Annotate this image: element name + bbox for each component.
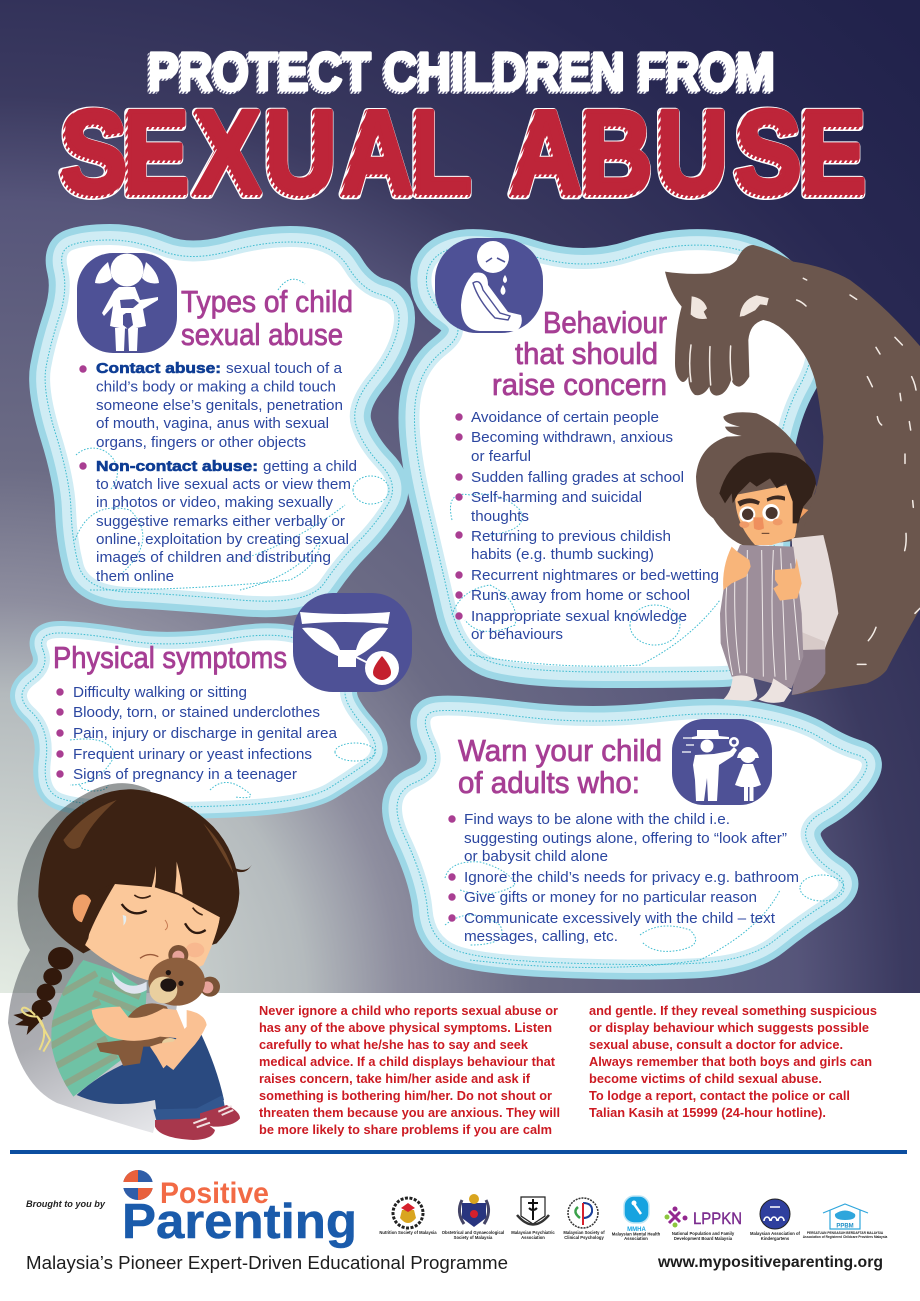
title — [60, 42, 866, 220]
text: warning list: Find ways to be alone with the child i.e. — [464, 811, 730, 828]
text: symptoms list: Frequent urinary or yeast infections — [73, 746, 312, 763]
text: abuse types list: online, exploitation by creating sexual — [96, 531, 349, 548]
icon: child being touched — [77, 253, 177, 353]
title line 2: SEXUAL ABUSE — [60, 88, 865, 220]
website: www.mypositiveparenting.org — [657, 1254, 883, 1271]
text: behaviour list: Returning to previous childish — [471, 528, 671, 545]
heading: physical symptoms: Physical symptoms — [53, 640, 287, 675]
advice column 2: become victims of child sexual abuse. — [589, 1071, 822, 1086]
title line 1: PROTECT CHILDREN FROM — [146, 44, 773, 104]
shoes — [155, 1105, 240, 1140]
text: behaviour list — [455, 409, 719, 643]
panel: types of child sexual abuse — [45, 240, 399, 601]
heading: types of child sexual abuse: sexual abuse — [181, 317, 343, 352]
advice column 2: Talian Kasih at 15999 (24-hour hotline). — [589, 1105, 826, 1120]
text: behaviour list: Runs away from home or school — [471, 587, 690, 604]
text: symptoms list: Difficulty walking or sitting — [73, 684, 247, 701]
shirt — [50, 960, 147, 1097]
text: abuse types list: someone else’s genitals, penetration — [96, 397, 343, 414]
logo: nutrition society: Nutrition Society of Malaysia — [379, 1230, 437, 1235]
advice column 2: or display behaviour which suggests possible — [589, 1020, 869, 1035]
logo: parenting: Parenting — [122, 1195, 357, 1249]
logo: LPPKN: National Population and Family — [672, 1231, 735, 1236]
advice column 1: has any of the above physical symptoms. Listen — [259, 1020, 552, 1035]
advice column 2 — [589, 1003, 877, 1120]
advice column 1 — [259, 1003, 560, 1137]
logo: clinical psychology — [563, 1198, 605, 1240]
logo: PPBM — [803, 1204, 887, 1239]
heading: types of child sexual abuse: Types of child — [181, 284, 353, 319]
hair — [38, 789, 252, 953]
logo: clinical psychology: Clinical Psychology — [564, 1235, 604, 1240]
text: behaviour list: Inappropriate sexual knowledge — [471, 608, 687, 625]
heading: behaviour that should raise concern: Behaviour — [543, 305, 667, 340]
icon: underwear with blood drop — [293, 593, 412, 692]
text: behaviour list: Self-harming and suicidal — [471, 489, 642, 506]
text: behaviour list: habits (e.g. thumb sucking) — [471, 546, 654, 563]
text: behaviour list: Sudden falling grades at school — [471, 469, 684, 486]
icon: crying child — [435, 238, 543, 333]
logo: psychiatric association — [511, 1197, 555, 1240]
logo: MMHA: Malaysian Mental Health — [612, 1232, 661, 1236]
advice column 1: threaten them because you are anxious. They will — [259, 1105, 560, 1120]
logo: kindergartens association: Malaysian Association of — [750, 1231, 801, 1236]
heading: types of child sexual abuse — [181, 284, 353, 352]
text: symptoms list: Pain, injury or discharge in genital area — [73, 725, 338, 742]
illustration: crying girl with teddy bear — [13, 789, 252, 1140]
icon: adult approaching child — [672, 719, 772, 805]
text: abuse types list: to watch live sexual acts or view them — [96, 476, 351, 493]
title line 2: SEXUAL ABUSE — [60, 88, 865, 220]
text: abuse types list: suggestive remarks either verbally or — [96, 513, 345, 530]
tagline: Malaysia’s Pioneer Expert-Driven Educational Programme — [26, 1252, 508, 1273]
logo: positive: Positive — [160, 1177, 269, 1210]
text: symptoms list: Signs of pregnancy in a teenager — [73, 766, 297, 783]
heading: warn your child of adults who — [458, 733, 662, 800]
frightened boy — [719, 452, 838, 703]
text: warning list: Ignore the child’s needs for privacy e.g. bathroom — [464, 869, 799, 886]
logo: LPPKN: LPPKN — [693, 1209, 742, 1228]
logo: positive parenting emblem — [122, 1170, 154, 1200]
text: abuse types list: Non-contact abuse: — [96, 458, 258, 475]
heading: behaviour that should raise concern: that should — [515, 336, 658, 371]
panel: warn your child — [397, 710, 867, 968]
heading: behaviour that should raise concern — [492, 305, 667, 402]
text: abuse types list: child’s body or making a child touch — [96, 378, 336, 396]
text: abuse types list: of mouth, vagina, anus with sexual — [96, 415, 329, 432]
text: abuse types list: Contact abuse: — [96, 360, 221, 377]
face — [73, 862, 235, 980]
logo: psychiatric association: Association — [521, 1235, 545, 1240]
text: abuse types list: in photos or video, making sexually — [96, 494, 333, 511]
text: warning list — [448, 811, 799, 945]
text: advice in red — [259, 1003, 877, 1137]
heading: warn your child of adults who: of adults who: — [458, 765, 640, 800]
text: warning list: Give gifts or money for no particular reason — [464, 889, 757, 906]
text: abuse types list: getting a child — [263, 458, 357, 475]
text: abuse types list: organs, fingers or other objects — [96, 434, 306, 451]
text: warning list: Communicate excessively with the child – text — [464, 910, 776, 927]
title line 2: SEXUAL ABUSE — [61, 86, 866, 218]
logo: nutrition society — [379, 1198, 437, 1235]
advice column 1: raises concern, take him/her aside and ask if — [259, 1071, 531, 1086]
advice column 2: Always remember that both boys and girls can — [589, 1054, 872, 1069]
logo: obstetrical society: Society of Malaysia — [454, 1235, 493, 1240]
logo: MMHA: Association — [624, 1236, 648, 1241]
white footer band — [0, 993, 920, 1301]
text: abuse types list: them online — [96, 568, 174, 585]
logo: PPBM: PERSATUAN PENGASUH BERDAFTAR MALAYSIA — [807, 1231, 884, 1235]
logo: LPPKN: Development Board Malaysia — [674, 1236, 733, 1241]
text: behaviour list: Avoidance of certain people — [471, 409, 659, 426]
logo: obstetrical society — [442, 1194, 504, 1240]
panel: physical symptoms — [22, 593, 412, 807]
shadow behind girl — [8, 783, 190, 1133]
logo: PPBM: PPBM — [836, 1224, 854, 1230]
monster shadow — [665, 245, 920, 695]
text: symptoms list: Bloody, torn, or stained underclothes — [73, 704, 320, 721]
text: behaviour list: Recurrent nightmares or bed-wetting — [471, 567, 719, 584]
advice column 1: carefully to what he/she has to say and seek — [259, 1037, 529, 1052]
logo: psychiatric association: Malaysian Psychiatric — [511, 1230, 555, 1235]
text: behaviour list: thoughts — [471, 508, 529, 525]
panel: behaviour that should raise concern — [414, 238, 812, 672]
teddy bear — [97, 945, 220, 1066]
text: abuse types list: sexual touch of a — [226, 360, 343, 377]
logo: obstetrical society: Obstetrical and Gynaecological — [442, 1230, 504, 1235]
advice column 1: medical advice. If a child displays behaviour that — [259, 1054, 556, 1069]
advice column 2: sexual abuse, consult a doctor for advice. — [589, 1037, 843, 1052]
text: behaviour list: Becoming withdrawn, anxious — [471, 429, 673, 446]
partner logos — [379, 1194, 887, 1241]
text: abuse types list — [79, 360, 357, 585]
text: behaviour list: or behaviours — [471, 626, 563, 643]
advice column 2: To lodge a report, contact the police or call — [589, 1088, 850, 1103]
blue rule — [10, 1150, 907, 1154]
heading: warn your child of adults who: Warn your child — [458, 733, 662, 768]
arms — [92, 1007, 207, 1070]
logo: MMHA — [612, 1196, 661, 1241]
text: symptoms list — [56, 684, 338, 783]
text: warning list: suggesting outings alone, offering to “look after” — [464, 830, 787, 847]
ribbon — [22, 1008, 50, 1052]
advice column 1: be more likely to share problems if you are calm — [259, 1122, 552, 1137]
text: warning list: or babysit child alone — [464, 848, 608, 865]
advice column 1: Never ignore a child who reports sexual abuse or — [259, 1003, 558, 1018]
braid — [13, 947, 73, 1035]
logo: clinical psychology: Malaysian Society of — [563, 1230, 605, 1235]
footer: brand — [26, 1170, 883, 1273]
text: abuse types list: images of children and distributing — [96, 549, 331, 566]
illustration: monster shadow and frightened boy — [665, 245, 920, 703]
heading: behaviour that should raise concern: raise concern — [492, 367, 667, 402]
advice column 1: something is bothering him/her. Do not shout or — [259, 1088, 552, 1103]
advice column 2: and gentle. If they reveal something suspicious — [589, 1003, 877, 1018]
logo: kindergartens association — [750, 1199, 801, 1241]
brought to you by: Brought to you by — [26, 1199, 106, 1210]
logo: PPBM: Association of Registered Childcare Providers Malaysia — [803, 1235, 887, 1239]
title line 1: PROTECT CHILDREN FROM — [148, 42, 775, 102]
jeans — [77, 1032, 225, 1122]
logo: kindergartens association: Kindergartens — [761, 1236, 790, 1241]
text: behaviour list: or fearful — [471, 448, 531, 465]
text: warning list: messages, calling, etc. — [464, 928, 618, 945]
logo: LPPKN — [664, 1206, 742, 1241]
logo: MMHA: MMHA — [627, 1227, 646, 1233]
